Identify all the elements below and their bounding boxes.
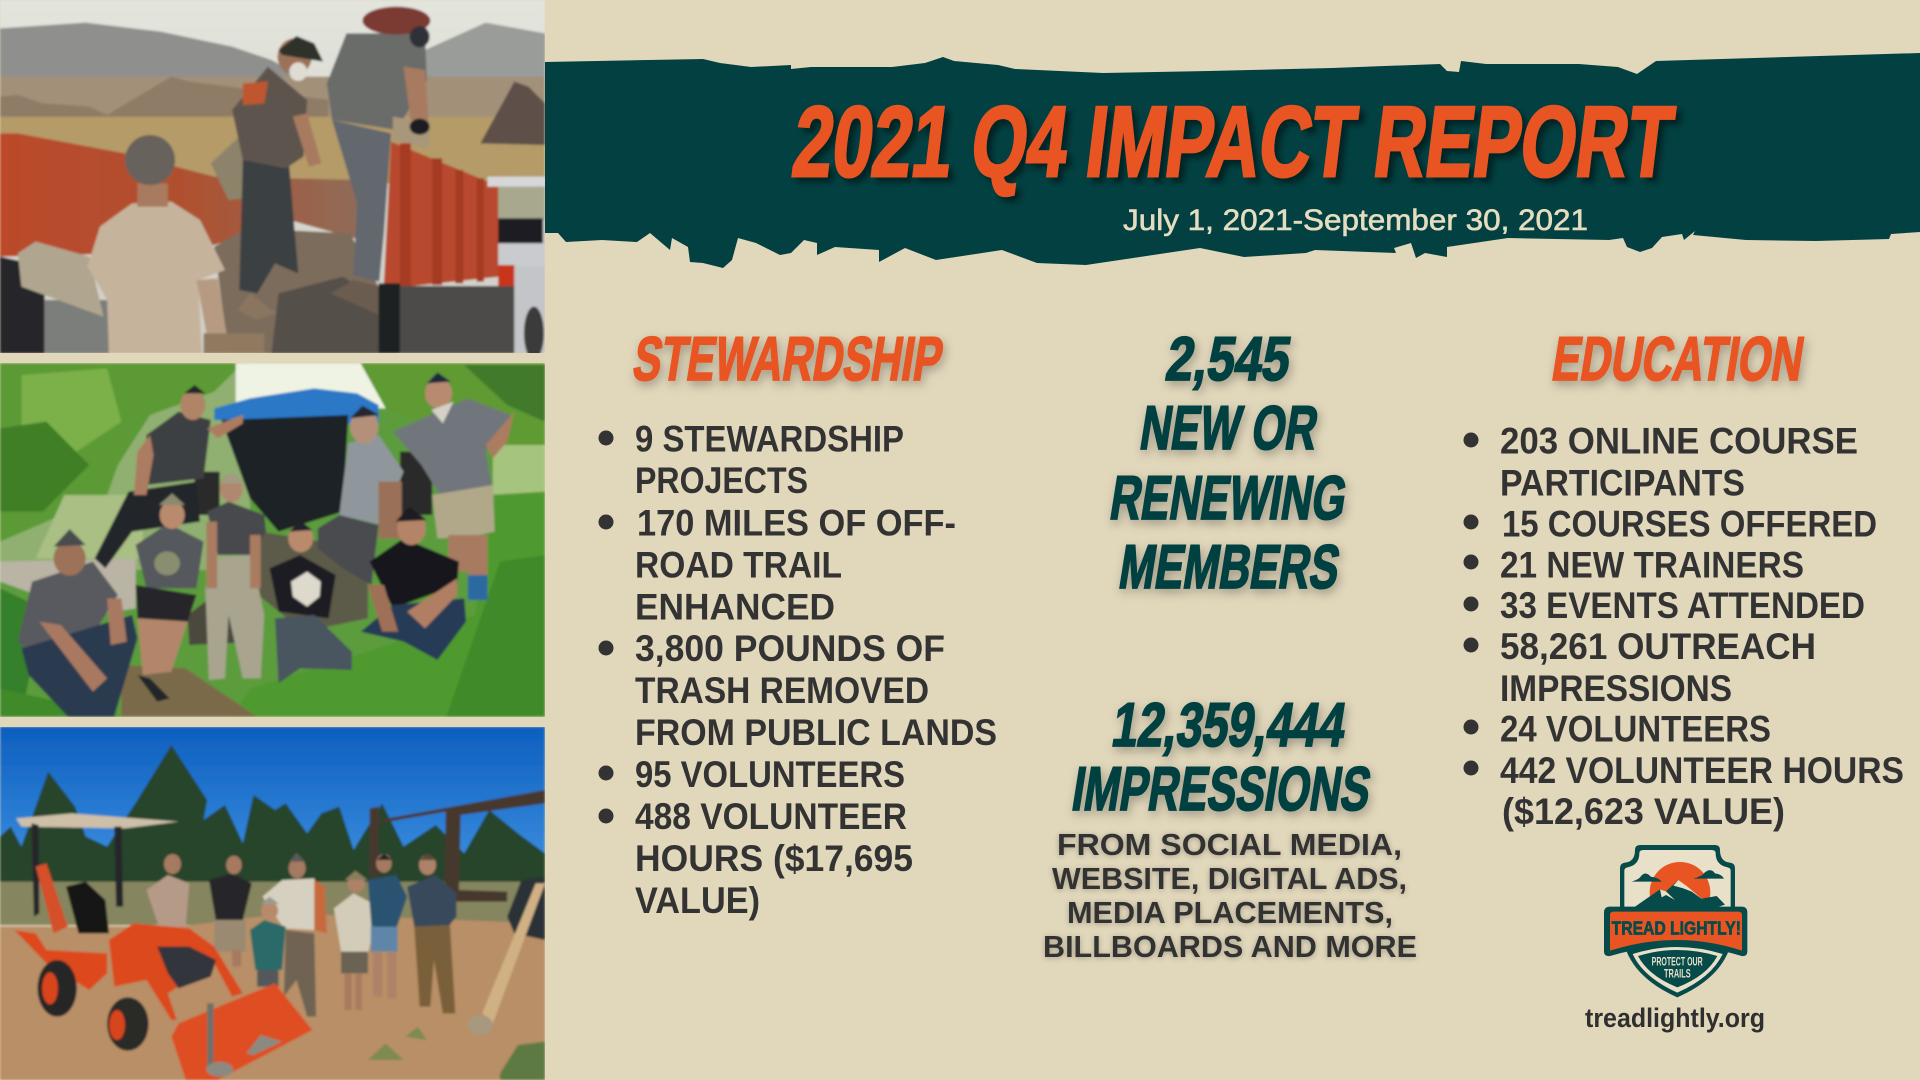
education list: IMPRESSIONS xyxy=(1500,667,1732,709)
impressions description: FROM SOCIAL MEDIA, xyxy=(1057,827,1402,862)
stat: impressions: 12,359,444 xyxy=(1108,691,1351,760)
header banner: torn dark teal strip xyxy=(545,53,1920,268)
education list: ($12,623 VALUE) xyxy=(1502,790,1785,832)
education list: 33 EVENTS ATTENDED xyxy=(1500,584,1865,626)
photo: group of nine posing in front of a blue jeep xyxy=(0,363,545,717)
photo: volunteers unloading a trailer in the desert xyxy=(0,0,545,360)
photo: volunteers with an orange tractor and timber frame xyxy=(0,727,545,1080)
education list xyxy=(1464,420,1904,832)
stat: impressions: IMPRESSIONS xyxy=(1068,755,1376,824)
education list: 203 ONLINE COURSE xyxy=(1500,420,1858,462)
stewardship list: 170 MILES OF OFF- xyxy=(637,502,956,544)
stewardship list: 95 VOLUNTEERS xyxy=(635,753,905,795)
stewardship list: 488 VOLUNTEER xyxy=(635,795,907,837)
impressions description: BILLBOARDS AND MORE xyxy=(1043,929,1417,964)
impressions description xyxy=(1043,827,1417,964)
logo: Tread Lightly shield: TREAD LIGHTLY! xyxy=(1612,918,1741,939)
stat: new or renewing members: NEW OR xyxy=(1136,394,1323,463)
stewardship list: VALUE) xyxy=(635,879,760,921)
impressions description: WEBSITE, DIGITAL ADS, xyxy=(1052,861,1407,896)
stat: new or renewing members: RENEWING xyxy=(1106,464,1352,533)
logo: Tread Lightly shield: PROTECT OUR xyxy=(1652,954,1703,968)
stewardship list: HOURS ($17,695 xyxy=(635,837,913,879)
heading: stewardship: STEWARDSHIP xyxy=(629,325,948,394)
education list: 24 VOLUNTEERS xyxy=(1500,708,1771,750)
stewardship list: ROAD TRAIL xyxy=(635,544,842,586)
stat: new or renewing members xyxy=(1106,325,1352,602)
stewardship list: 9 STEWARDSHIP xyxy=(635,418,904,460)
logo: Tread Lightly shield xyxy=(1604,845,1747,997)
heading: education: EDUCATION xyxy=(1548,325,1809,394)
stat: impressions xyxy=(1068,691,1376,824)
logo: Tread Lightly shield: TRAILS xyxy=(1664,966,1691,980)
stewardship list: FROM PUBLIC LANDS xyxy=(635,711,997,753)
education list: 58,261 OUTREACH xyxy=(1500,625,1816,667)
education list: 15 COURSES OFFERED xyxy=(1502,502,1877,544)
stat: new or renewing members: MEMBERS xyxy=(1115,533,1345,602)
stewardship list: PROJECTS xyxy=(635,459,808,501)
education list: 21 NEW TRAINERS xyxy=(1500,544,1804,586)
website url: treadlightly.org xyxy=(1585,1003,1765,1033)
stewardship list: ENHANCED xyxy=(635,586,835,628)
impressions description: MEDIA PLACEMENTS, xyxy=(1067,895,1393,930)
stewardship list xyxy=(598,418,997,921)
stewardship list: 3,800 POUNDS OF xyxy=(635,627,945,669)
stat: new or renewing members: 2,545 xyxy=(1162,325,1296,394)
date range: July 1, 2021-September 30, 2021 xyxy=(1123,204,1588,237)
education list: PARTICIPANTS xyxy=(1500,462,1745,504)
stewardship list: TRASH REMOVED xyxy=(635,669,929,711)
